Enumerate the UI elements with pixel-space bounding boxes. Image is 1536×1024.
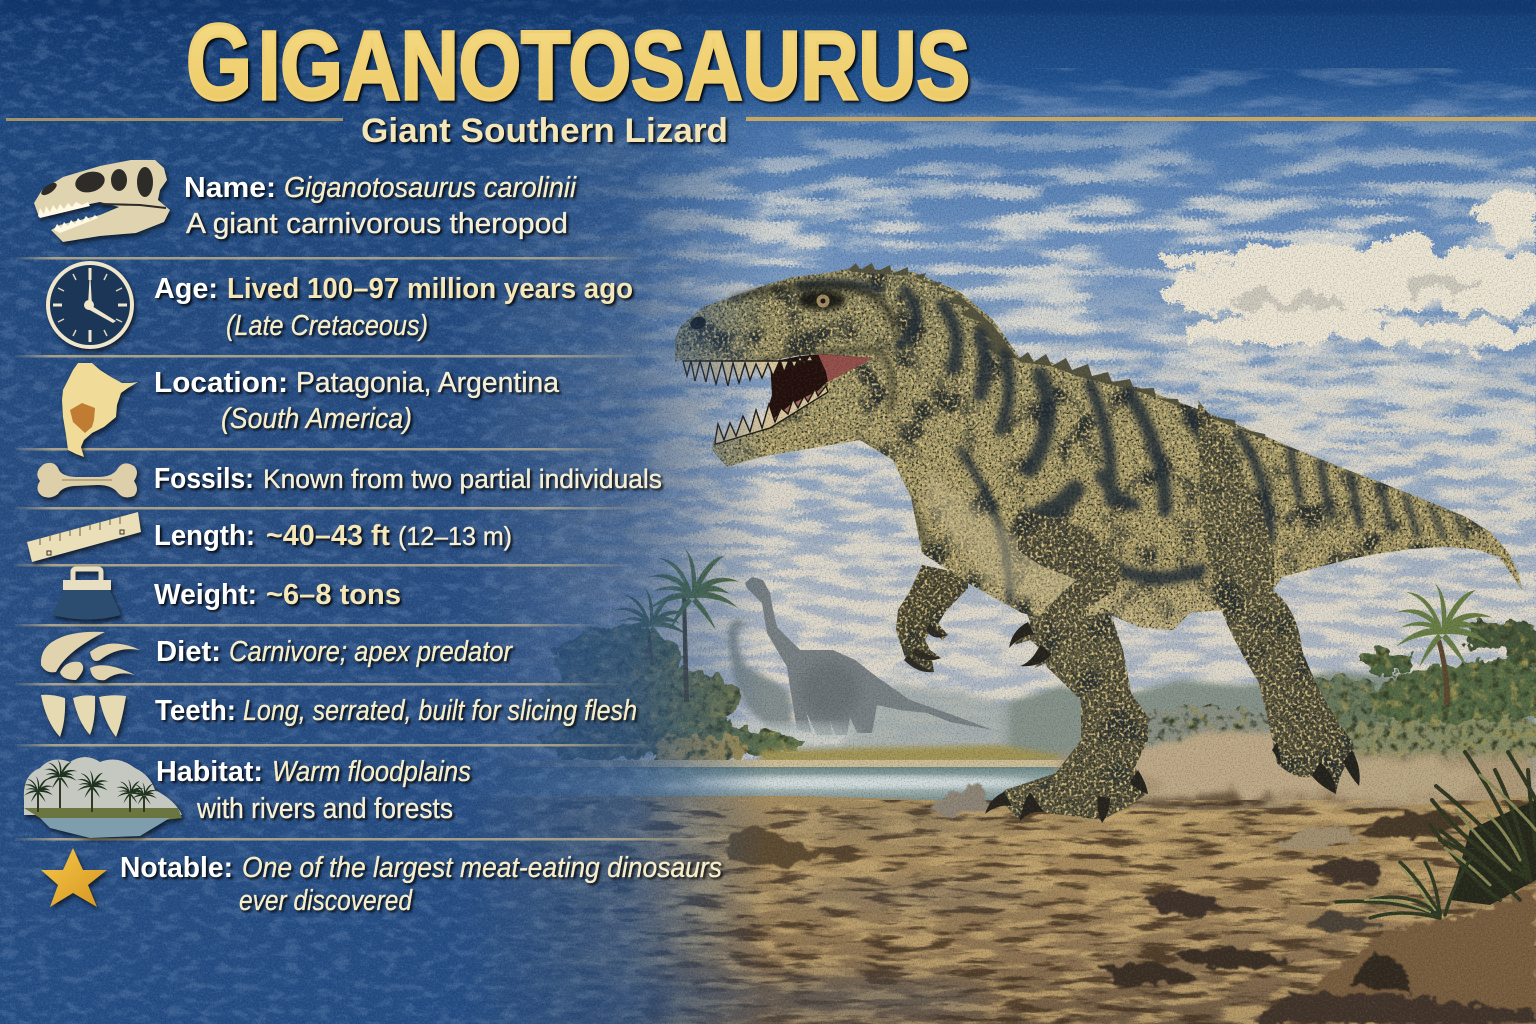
text: age <box>154 273 633 342</box>
small sauropod <box>728 620 793 730</box>
icon: bone <box>37 463 137 498</box>
top sky vignette <box>0 0 1536 14</box>
title rule right <box>746 117 1536 121</box>
brow ridge <box>730 286 895 330</box>
belly highlight <box>925 470 1106 606</box>
skin stripes <box>760 283 1468 600</box>
icon: claws <box>41 632 140 680</box>
text: diet: Diet: <box>156 636 221 668</box>
near arm claws <box>1009 622 1052 666</box>
text: location <box>154 367 560 435</box>
icon: map of Argentina <box>62 363 138 457</box>
near arm <box>1014 510 1123 668</box>
trees: right forest <box>1130 619 1536 762</box>
text: length: (12–13 m) <box>398 521 512 551</box>
row: notable <box>41 848 722 917</box>
dorsal spines <box>848 263 1298 453</box>
background: faint high clouds <box>950 68 1536 116</box>
background: left forest <box>540 548 1060 765</box>
far arm claws <box>904 622 947 672</box>
rear leg <box>1198 400 1356 793</box>
text: location: Patagonia, Argentina <box>296 367 560 399</box>
background: sauropods <box>680 577 993 747</box>
eye <box>798 290 846 310</box>
front leg claws <box>985 770 1148 823</box>
tail and torso and head <box>675 268 1522 630</box>
left info panel background <box>0 0 761 1024</box>
text: notable: Notable: <box>120 852 233 884</box>
rocks <box>590 788 1536 1024</box>
text: length <box>154 520 512 552</box>
row: teeth <box>41 695 637 737</box>
text: weight: ~6–8 tons <box>266 579 401 611</box>
text: fossils: Fossils: <box>154 463 254 495</box>
background: ground <box>0 788 1536 1024</box>
title <box>186 1 970 122</box>
text: habitat: with rivers and forests <box>196 793 453 825</box>
text: age: Age: <box>154 273 218 305</box>
background: stratus cloud bands <box>506 110 1536 497</box>
icon: clock <box>48 263 132 347</box>
row: location <box>62 363 560 457</box>
row dividers <box>15 257 735 840</box>
background: distant hills <box>840 582 1536 780</box>
icon: habitat scene <box>23 757 182 838</box>
text: length: ~40–43 ft <box>266 520 390 552</box>
title rule left <box>6 118 343 121</box>
text: teeth: Long, serrated, built for slicing flesh <box>243 695 637 727</box>
mouth interior <box>762 354 873 428</box>
text: name <box>184 172 577 240</box>
icon: star <box>41 848 107 907</box>
bush <box>652 735 748 765</box>
row: fossils <box>37 463 662 498</box>
title: G <box>186 1 252 122</box>
text: name: Giganotosaurus carolinii <box>284 172 577 204</box>
shadows on ground <box>530 818 1040 1022</box>
background: river <box>500 760 1100 801</box>
text: location: Location: <box>154 367 288 399</box>
tongue and palate <box>766 354 873 425</box>
text: age: Lived 100–97 million years ago <box>227 273 633 305</box>
text: habitat <box>156 756 471 825</box>
far arm <box>896 565 968 672</box>
text: weight: Weight: <box>154 579 257 611</box>
rear leg claws <box>1272 742 1360 794</box>
text: diet: Carnivore; apex predator <box>229 636 513 668</box>
row: name <box>34 160 577 242</box>
illustration: Giganotosaurus <box>675 263 1536 918</box>
text: notable <box>120 852 722 917</box>
icon: weight <box>52 569 121 620</box>
icon: small palm <box>613 587 688 665</box>
title: IGANOTOSAURUS <box>258 11 970 120</box>
row: length <box>27 512 512 562</box>
grass <box>1336 752 1536 918</box>
text: location: (South America) <box>221 403 412 435</box>
icon: ruler <box>27 512 141 562</box>
upper teeth <box>683 355 813 386</box>
text: habitat: Habitat: <box>156 756 263 788</box>
icon: teeth <box>41 695 126 737</box>
background: popcorn clouds <box>521 274 1536 794</box>
text: name: Name: <box>184 172 276 204</box>
subtitle: Giant Southern Lizard <box>361 112 728 150</box>
text: habitat: Warm floodplains <box>272 756 471 788</box>
nostril <box>688 315 708 331</box>
lower teeth <box>715 386 828 444</box>
icon: tall palm <box>646 548 740 702</box>
background: sky <box>486 0 1536 796</box>
icon: right palm <box>1394 582 1492 705</box>
icon: skull <box>34 160 170 242</box>
front leg <box>985 600 1148 820</box>
large sauropod <box>745 577 993 735</box>
text: notable: One of the largest meat-eating dinosaurs <box>242 852 722 884</box>
text: name: A giant carnivorous theropod <box>186 208 568 240</box>
text: weight <box>154 579 401 611</box>
background: cumulus clouds <box>1160 189 1536 349</box>
text: notable: ever discovered <box>239 885 413 917</box>
text: fossils: Known from two partial individuals <box>263 464 662 494</box>
text: age: (Late Cretaceous) <box>226 310 428 342</box>
row: weight <box>52 569 401 620</box>
text: length: Length: <box>154 520 255 552</box>
background: dust bed <box>1060 755 1536 815</box>
row: age <box>48 263 633 347</box>
row: diet <box>41 632 513 680</box>
background: dust clouds <box>1130 731 1480 811</box>
text: teeth: Teeth: <box>155 695 236 727</box>
row: habitat <box>23 756 471 838</box>
